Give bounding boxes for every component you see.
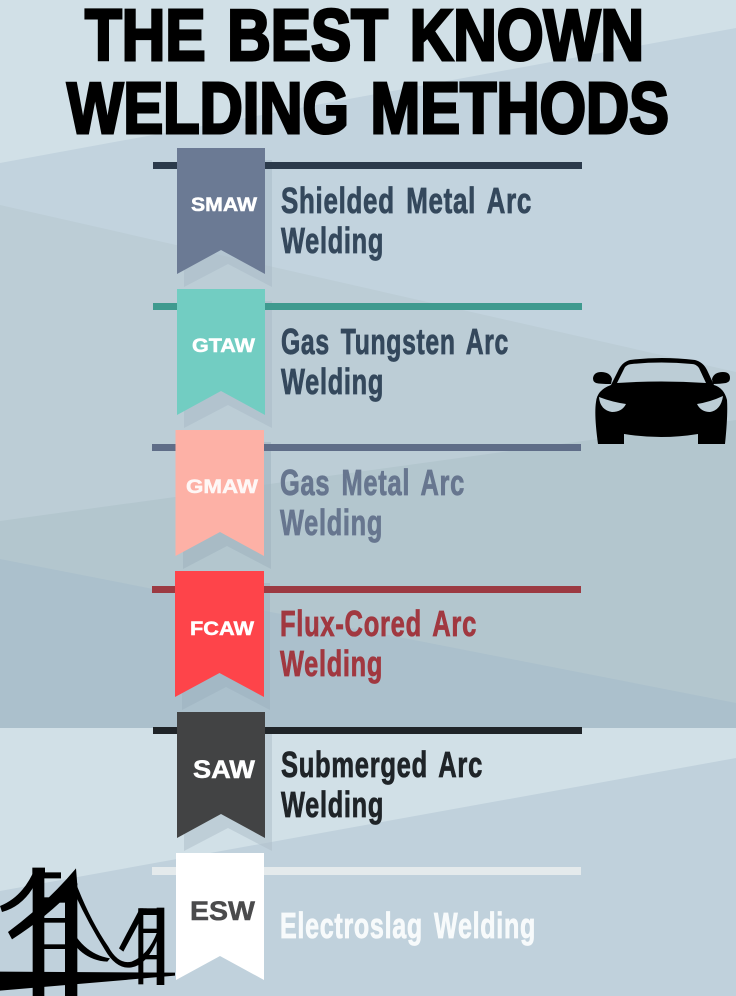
method: GMAW: GMAW [186, 477, 258, 498]
method: GMAW: Gas Metal Arc [280, 462, 465, 503]
method: ESW [152, 853, 581, 980]
method: ESW: ESW [190, 896, 256, 926]
method: GTAW: GTAW [192, 336, 255, 357]
icon: car [593, 358, 730, 444]
title [67, 0, 669, 149]
method: SMAW: Shielded Metal Arc [281, 180, 532, 221]
method: SMAW: Welding [281, 220, 384, 261]
method: FCAW: FCAW [190, 619, 254, 640]
method: FCAW: Welding [280, 643, 383, 684]
icon: bridge [0, 868, 175, 996]
method: FCAW [152, 571, 581, 710]
method: GTAW: Welding [281, 361, 384, 402]
method: SMAW: SMAW [191, 195, 257, 216]
method: GTAW: Gas Tungsten Arc [281, 321, 509, 362]
method: GTAW [153, 289, 582, 428]
method: SAW [153, 712, 582, 851]
method: GMAW [152, 430, 581, 569]
method: ESW: Electroslag Welding [280, 905, 536, 946]
method: SAW: Submerged Arc [281, 744, 483, 785]
method: SMAW [153, 148, 582, 287]
method: SAW: Welding [281, 784, 384, 825]
method: GMAW: Welding [280, 502, 383, 543]
method: SAW: SAW [193, 756, 255, 784]
method: FCAW: Flux-Cored Arc [280, 603, 477, 644]
